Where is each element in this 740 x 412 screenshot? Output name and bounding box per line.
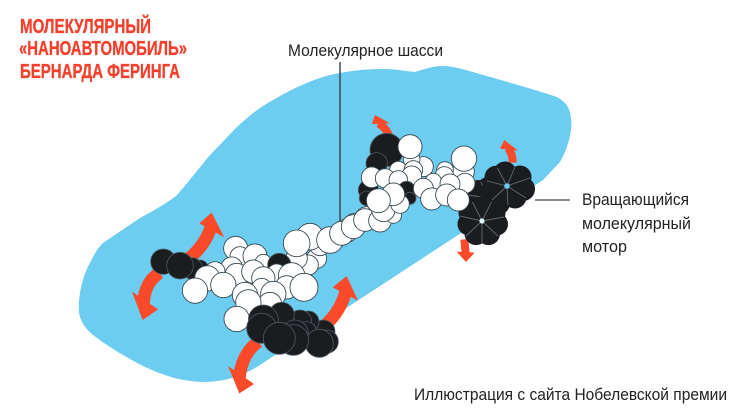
label: motor: Вращающийся	[582, 190, 689, 209]
white atoms, left cluster	[182, 205, 387, 303]
arrow: front upper	[327, 276, 358, 324]
label: motor	[582, 190, 691, 256]
black atom, right centre	[398, 181, 416, 204]
black atoms behind right cluster	[358, 133, 403, 206]
molecule: right half	[317, 133, 477, 253]
arrow: front lower	[228, 342, 258, 393]
leader line: motor	[535, 199, 570, 201]
title: «НАНОАВТОМОБИЛЬ»	[19, 38, 187, 60]
arrow: top right small	[500, 140, 518, 163]
arrow: bottom small	[457, 239, 475, 262]
title: МОЛЕКУЛЯРНЫЙ	[20, 14, 151, 38]
black rear wheel group	[151, 249, 208, 279]
arrow: rear upper	[188, 213, 224, 259]
white atoms, front of right cluster	[366, 135, 477, 213]
label: motor: мотор	[582, 237, 627, 256]
label: motor: молекулярный	[582, 214, 691, 233]
molecule: left half	[151, 205, 387, 357]
molecular motor	[458, 162, 535, 245]
motor stator: middle	[462, 177, 510, 220]
label: chassis: Молекулярное шасси	[288, 41, 443, 60]
arrow: rear lower	[132, 273, 159, 320]
arrow: top left small	[372, 115, 390, 136]
title	[19, 14, 187, 83]
white atoms, centre cluster	[224, 223, 323, 332]
title: БЕРНАРДА ФЕРИНГА	[20, 61, 180, 83]
white atoms, chain and back of right cluster	[317, 151, 475, 253]
leader line: chassis	[339, 62, 341, 228]
rotation arrows: left wheels	[132, 213, 358, 393]
black front wheel group	[247, 302, 338, 357]
motor rotor: lower	[458, 196, 508, 245]
car silhouette	[79, 66, 571, 382]
rotation arrows: right wheels	[372, 115, 518, 262]
black atom, centre	[268, 253, 291, 277]
motor rotor: upper	[482, 162, 535, 210]
